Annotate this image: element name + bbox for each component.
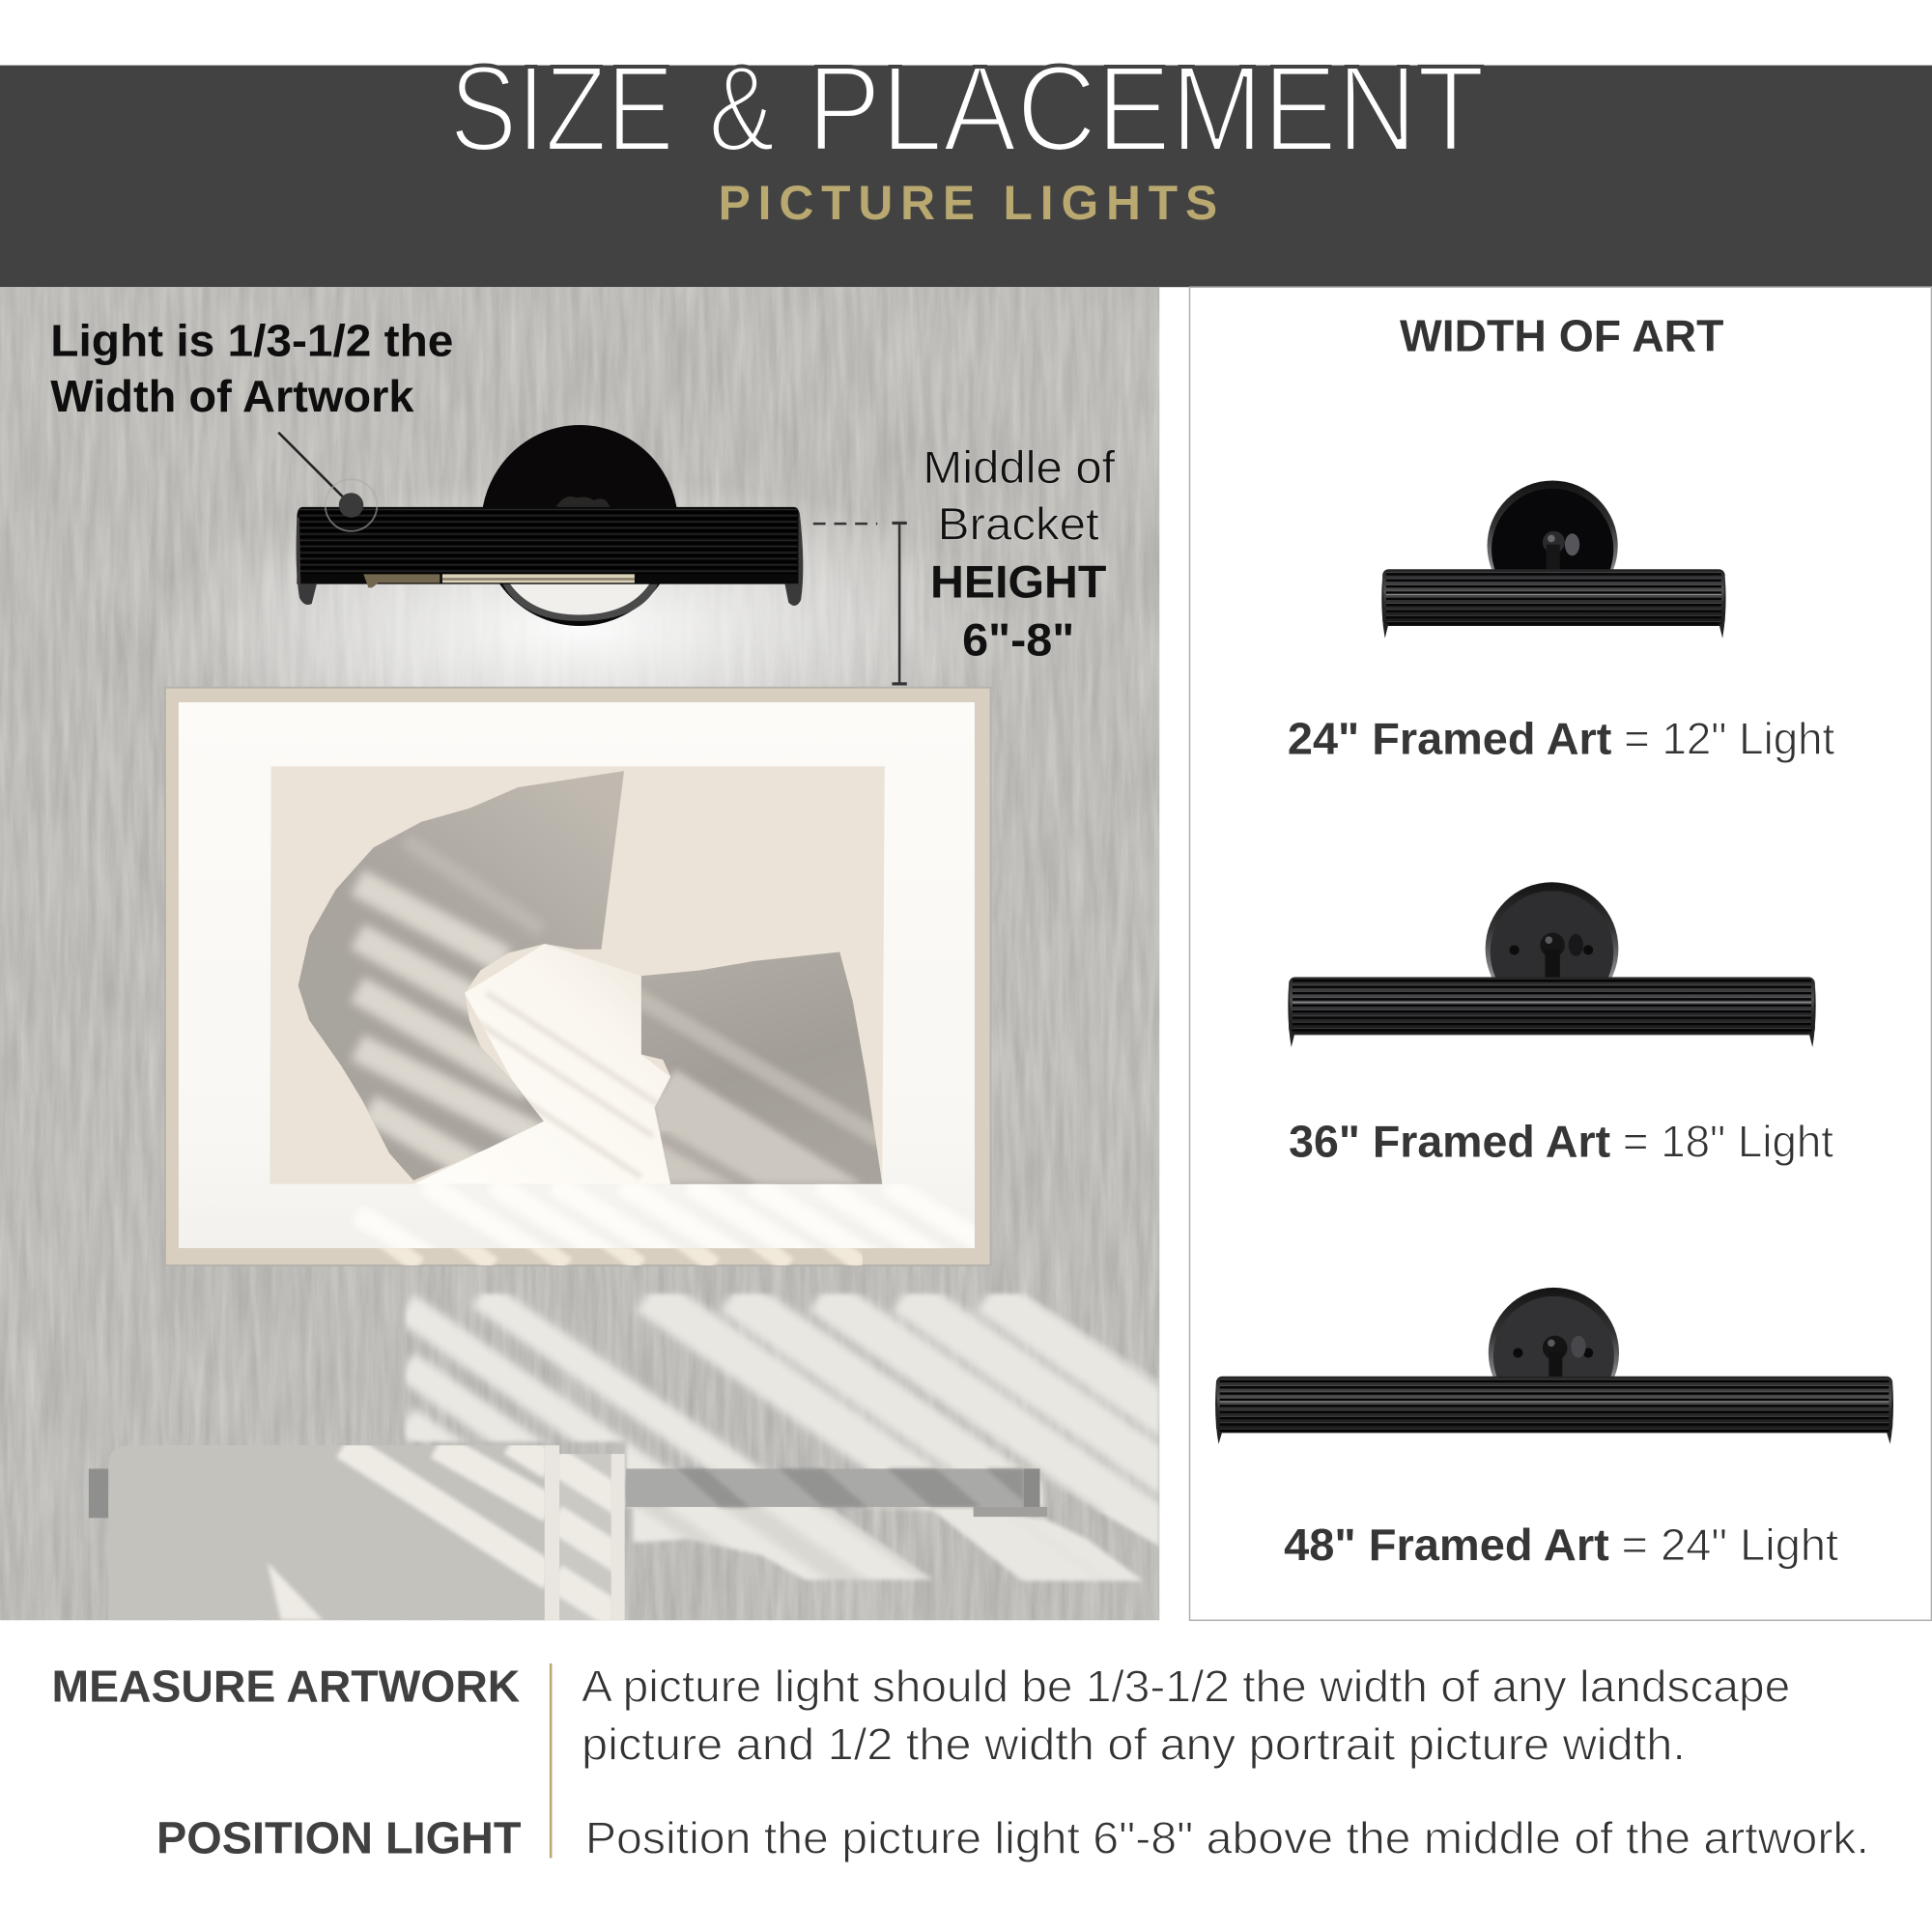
mat [179, 702, 975, 1248]
header band [0, 41, 1932, 287]
print [270, 766, 885, 1184]
light: 18 inch [1288, 882, 1816, 1047]
bulb strip [442, 574, 635, 582]
text: measure artwork [582, 1661, 1790, 1769]
panel: room scene with picture light [0, 287, 1159, 1621]
callout text: light width: Light is 1/3-1/2 the [50, 316, 453, 366]
light bands on lower mat [357, 1184, 975, 1248]
end caps [297, 518, 317, 605]
callout text: bracket height: Bracket [938, 499, 1099, 551]
caption: 12 inch light: = 12" Light [1624, 714, 1834, 764]
caption: 48 inch art: 48" Framed Art [1284, 1520, 1609, 1570]
callout text: light width: Width of Artwork [50, 371, 414, 421]
title: & [708, 41, 775, 177]
callout text: bracket height: HEIGHT [930, 557, 1107, 609]
print bright center [414, 944, 670, 1184]
height bracket [813, 523, 907, 684]
light: 24 inch [1215, 1288, 1893, 1444]
soft shadows on center [474, 993, 666, 1177]
chair [108, 1441, 629, 1624]
callout text: bracket height [923, 442, 1116, 667]
caption: 24 inch light: = 24" Light [1622, 1520, 1838, 1570]
section: instructions [52, 1661, 1869, 1862]
glow under the light [195, 497, 955, 687]
text: measure artwork: picture and 1/2 the width of any portrait picture width. [582, 1719, 1686, 1769]
framed artwork [165, 688, 1040, 1279]
panel heading: WIDTH OF ART [1400, 311, 1723, 361]
title [450, 41, 1485, 177]
caption: 36 inch art: 36" Framed Art [1289, 1117, 1610, 1167]
frame [165, 688, 991, 1265]
light bands on left shape [357, 840, 554, 1171]
backplate [481, 425, 678, 626]
light: 12 inch [1381, 480, 1726, 639]
panel: width of art [1190, 287, 1931, 1620]
text: position light: Position the picture light 6"-8" above the middle of the artwork. [585, 1812, 1869, 1862]
sunlight stripes on wall [404, 1292, 1159, 1582]
light patches on lower frame [381, 1248, 863, 1265]
print shape left [298, 771, 624, 1180]
subtitle: PICTURE LIGHTS [719, 176, 1217, 230]
divider [550, 1663, 552, 1858]
caption: 24 inch art: 24" Framed Art [1288, 714, 1611, 764]
title: PLACEMENT [807, 41, 1485, 177]
callout text: bracket height: Middle of [923, 442, 1116, 494]
lit lower plate [502, 584, 658, 621]
print shape right [641, 952, 882, 1184]
text: measure artwork: A picture light should be 1/3-1/2 the width of any landscape [582, 1661, 1790, 1711]
callout text: bracket height: 6"-8" [962, 615, 1074, 667]
table bar [89, 1468, 1047, 1518]
label: position light: POSITION LIGHT [156, 1812, 522, 1862]
concrete wall [0, 287, 1159, 1620]
shade [297, 507, 800, 584]
mount knob [555, 497, 610, 508]
light bands on right shape [635, 996, 882, 1189]
callout text: light width [50, 316, 453, 421]
title: SIZE [450, 41, 674, 177]
callout marker and leader line [278, 433, 377, 531]
picture light on wall [297, 425, 803, 626]
label: measure artwork: MEASURE ARTWORK [52, 1661, 520, 1711]
caption: 18 inch light: = 18" Light [1623, 1117, 1833, 1167]
